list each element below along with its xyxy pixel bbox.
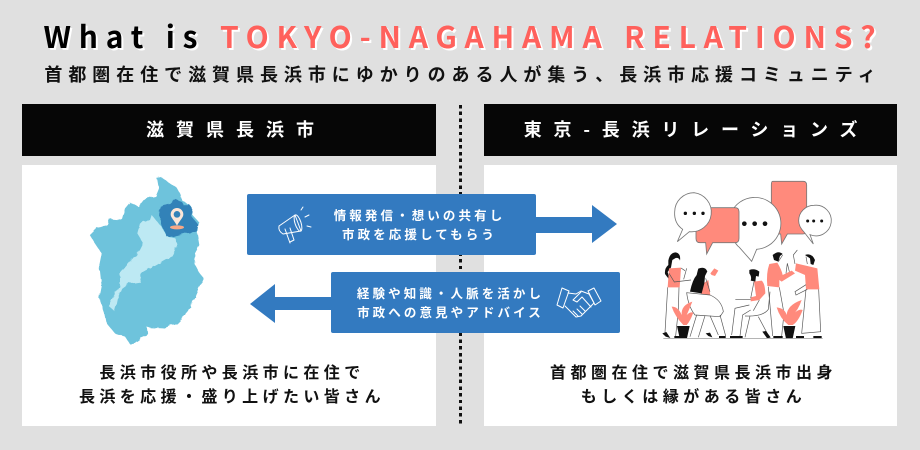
icon: megaphone	[278, 206, 312, 244]
map of Shiga prefecture	[90, 176, 204, 345]
left group of people	[662, 252, 726, 338]
plant left	[672, 302, 693, 338]
right group of people	[663, 250, 823, 339]
bubble dots	[684, 212, 823, 226]
panel header: Tokyo-Nagahama Relations: 東京-長浜リレーションズ	[524, 116, 869, 142]
blue box	[331, 272, 620, 333]
box text	[334, 205, 505, 243]
caption: Nagahama residents	[79, 359, 385, 407]
location pin	[170, 208, 184, 229]
box text	[357, 283, 544, 321]
person: standing woman	[662, 252, 691, 338]
panel: Nagahama residents	[22, 165, 436, 426]
box text: 市政を応援してもらう	[342, 224, 497, 243]
panel: capital-area supporters	[484, 165, 897, 426]
arrow right	[536, 205, 617, 243]
arrow box: supporters to Nagahama	[250, 272, 620, 333]
person: seated woman with long hair	[687, 268, 726, 338]
arrow left	[250, 284, 331, 323]
person: seated bearded man	[730, 269, 771, 339]
caption: capital-area supporters: もしくは縁がある皆さん	[581, 383, 806, 407]
person: woman with high five	[793, 250, 822, 338]
box text: 経験や知識・人脈を活かし	[357, 283, 544, 302]
divider: dotted centre line	[459, 105, 462, 426]
person: man with glasses	[767, 252, 795, 338]
Lake Biwa	[108, 215, 177, 312]
subtitle: 首都圏在住で滋賀県長浜市にゆかりのある人が集う、長浜市応援コミュニティ	[44, 61, 882, 87]
panel header: Shiga Nagahama: 滋賀県長浜市	[146, 116, 326, 142]
caption: Nagahama residents: 長浜を応援・盛り上げたい皆さん	[79, 383, 385, 407]
caption: capital-area supporters: 首都圏在住で滋賀県長浜市出身	[550, 359, 837, 383]
arrow box: Nagahama to supporters	[247, 194, 617, 255]
plant right	[777, 300, 803, 339]
box text: 情報発信・想いの共有し	[334, 205, 505, 224]
blue box	[247, 194, 536, 255]
speech bubbles	[675, 181, 831, 261]
panel header: Shiga Nagahama	[22, 104, 436, 156]
illustration: people talking with speech bubbles	[662, 180, 832, 339]
title: What is TOKYO-NAGAHAMA RELATIONS?	[44, 13, 883, 57]
panel header: Tokyo-Nagahama Relations	[484, 104, 897, 156]
icon: handshake	[556, 288, 602, 318]
ground line	[663, 337, 823, 339]
box text: 市政への意見やアドバイス	[357, 302, 544, 321]
prefecture outline	[90, 177, 204, 345]
caption: capital-area supporters	[550, 359, 837, 407]
Nagahama city	[159, 198, 198, 237]
caption: Nagahama residents: 長浜市役所や長浜市に在住で	[99, 359, 365, 383]
map shapes	[90, 177, 204, 345]
